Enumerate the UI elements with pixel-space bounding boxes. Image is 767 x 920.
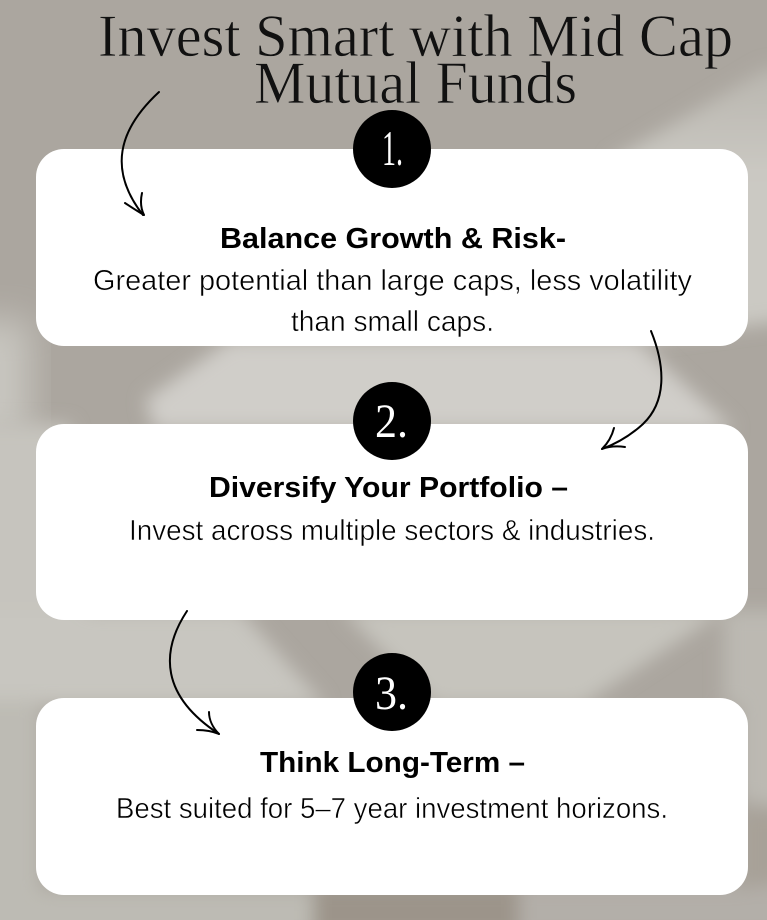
panel: step 1 — [36, 149, 748, 346]
arrow 2 — [602, 331, 661, 449]
arrow 3 — [170, 611, 219, 734]
title: Mutual Funds — [254, 50, 577, 116]
arrow 1 — [122, 92, 159, 215]
title — [98, 3, 733, 116]
number badge 2: 2. — [375, 395, 408, 448]
title: Invest Smart with Mid Cap — [98, 3, 733, 69]
number badge 1 — [353, 110, 431, 188]
number badge 1: 1. — [382, 120, 403, 176]
step 3 body: Best suited for 5–7 year investment horizons. — [116, 793, 668, 825]
card 2 — [36, 424, 748, 620]
step 3 heading: Think Long-Term – — [260, 747, 525, 779]
step 2 heading: Diversify Your Portfolio – — [209, 472, 568, 504]
panel: step 3 — [36, 698, 748, 895]
step 2 body: Invest across multiple sectors & industries. — [129, 515, 655, 547]
card 1 — [36, 149, 748, 346]
number badge 2 — [353, 382, 431, 460]
step 1 body — [93, 265, 692, 338]
card 3 — [36, 698, 748, 895]
step 1 heading: Balance Growth & Risk- — [220, 223, 566, 255]
number badge 3 — [353, 653, 431, 731]
step 1 body: Greater potential than large caps, less volatility — [93, 265, 692, 297]
panel: step 2 — [36, 424, 748, 620]
step 1 body: than small caps. — [291, 306, 494, 338]
number badge 3: 3. — [375, 667, 408, 720]
